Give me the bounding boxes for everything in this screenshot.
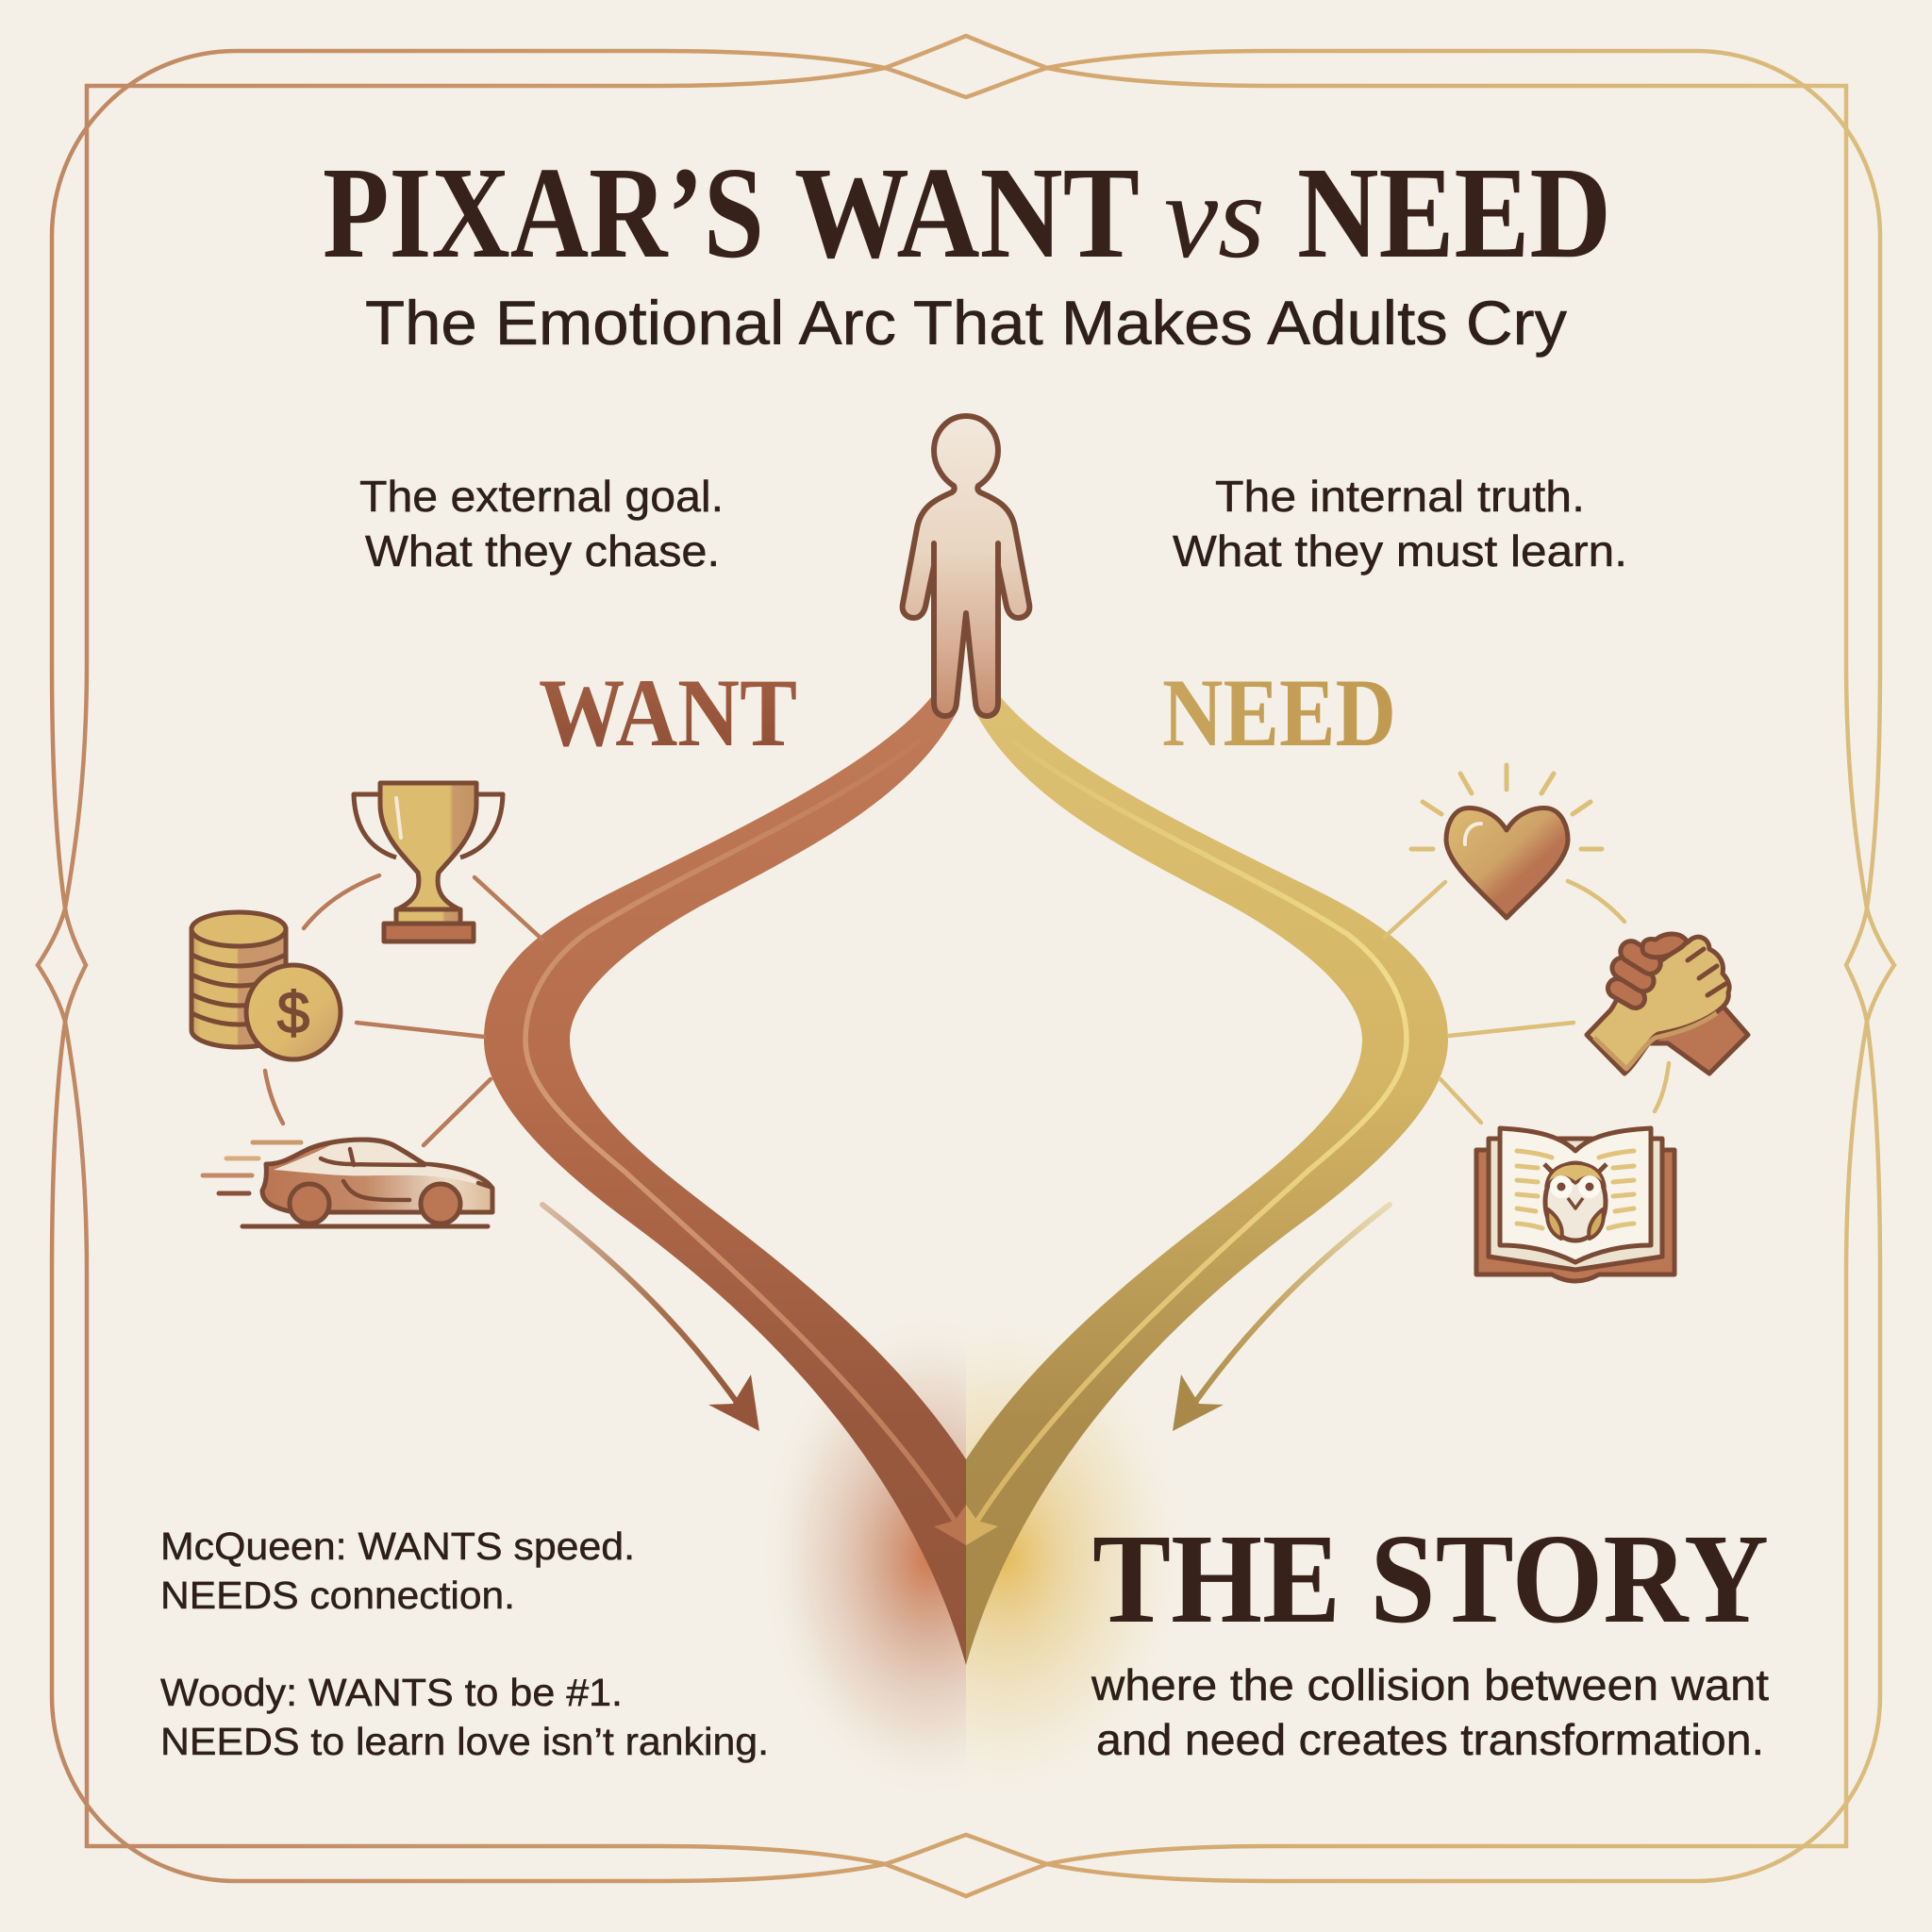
- heading: the story: THE STORY: [1092, 1508, 1769, 1650]
- text: need definition: The internal truth.: [1215, 472, 1585, 521]
- title: WANT: [794, 141, 1140, 286]
- icon: car: [203, 1140, 492, 1226]
- connectors: want icons: [265, 875, 542, 1145]
- collision glow: [736, 1302, 1202, 1811]
- text: want definition: [359, 472, 724, 575]
- text: story description: and need creates transformation.: [1096, 1715, 1764, 1764]
- text: want definition: What they chase.: [365, 526, 720, 575]
- text: story description: where the collision between want: [1091, 1660, 1769, 1709]
- arrow: want to story: [542, 1205, 759, 1431]
- text: need definition: [1173, 472, 1627, 575]
- icon: coins: [192, 912, 341, 1059]
- icon: heart: [1411, 765, 1602, 918]
- text: want definition: The external goal.: [359, 472, 724, 521]
- heading: WANT: WANT: [539, 659, 797, 767]
- title: PIXAR’S: [323, 141, 764, 286]
- icon: open book with owl: [1476, 1128, 1674, 1281]
- text: story description: [1091, 1660, 1769, 1764]
- subtitle: The Emotional Arc That Makes Adults Cry: [365, 288, 1567, 358]
- icon: trophy: [354, 783, 503, 941]
- text: movie examples: NEEDS connection.: [160, 1574, 515, 1617]
- need path: [966, 696, 1448, 1665]
- arrow: need to story: [1173, 1205, 1390, 1431]
- want path: [484, 696, 966, 1665]
- connectors: need icons: [1385, 881, 1669, 1123]
- heading: NEED: NEED: [1162, 659, 1396, 767]
- title: [323, 141, 1611, 286]
- text: need definition: What they must learn.: [1173, 526, 1627, 575]
- icon: owl: [1544, 1163, 1607, 1241]
- text: movie examples: McQueen: WANTS speed.: [160, 1524, 635, 1568]
- icon: handshake: [1587, 934, 1748, 1074]
- icon: coins: $: [277, 981, 309, 1046]
- text: movie examples: Woody: WANTS to be #1.: [160, 1671, 623, 1714]
- text: movie examples: [160, 1524, 769, 1763]
- title: NEED: [1297, 141, 1611, 286]
- icon: person: [903, 416, 1029, 716]
- title: vs: [1164, 149, 1265, 283]
- text: movie examples: NEEDS to learn love isn’t ranking.: [160, 1720, 769, 1763]
